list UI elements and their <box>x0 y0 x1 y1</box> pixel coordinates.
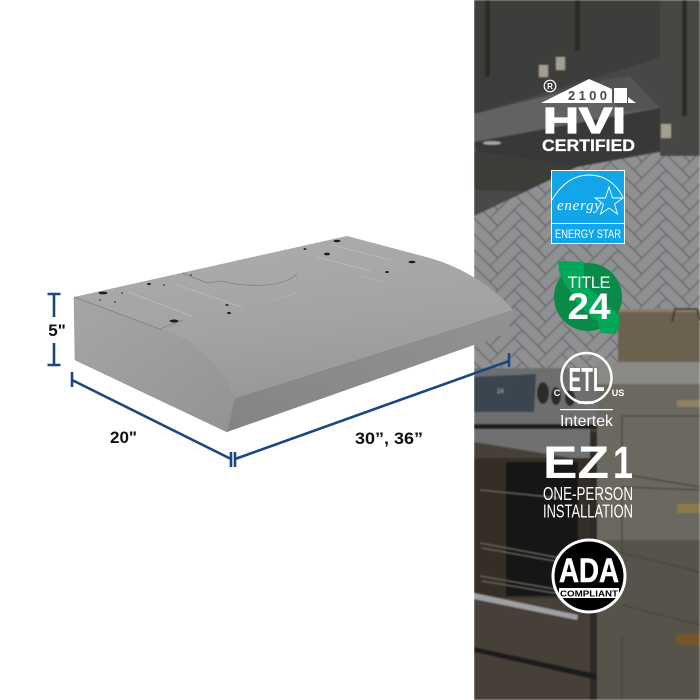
badge: ADA compliant: COMPLIANT <box>560 588 619 598</box>
badge: Title 24: 24 <box>568 286 611 327</box>
badge: HVI certified <box>541 79 636 155</box>
screw holes <box>98 240 416 322</box>
badge: EZ1 one-person installation: EZ <box>543 437 609 488</box>
lower cabinets <box>596 384 700 540</box>
mounting plate details <box>74 245 390 329</box>
badge: HVI certified: HVI <box>543 100 626 141</box>
wall under hood <box>474 153 577 216</box>
badge: ETL listed Intertek <box>554 353 624 430</box>
badge: Energy Star: energy <box>557 198 601 214</box>
badge: Energy Star <box>552 170 624 244</box>
range control panel <box>474 368 597 428</box>
range hood product <box>74 236 513 432</box>
dimension: height 5 inches <box>48 294 66 365</box>
countertop <box>597 362 700 386</box>
badge: EZ1 one-person installation: ONE-PERSON <box>543 484 633 504</box>
badge: ETL listed Intertek: US <box>612 388 624 398</box>
badge: ETL listed Intertek: Intertek <box>560 413 614 430</box>
badge: HVI certified: 2100 <box>568 88 607 103</box>
oven racks <box>480 490 560 594</box>
dimension: width 30 and 36 inches: 30”, 36” <box>355 429 423 448</box>
badge: EZ1 one-person installation <box>543 437 633 522</box>
kitchen photo panel: 24 <box>497 389 504 395</box>
hood top surface <box>74 236 513 398</box>
kitchen photo panel <box>474 0 700 700</box>
pot <box>618 309 700 366</box>
badge: HVI certified: CERTIFIED <box>542 137 635 155</box>
badge: Title 24 <box>554 261 622 334</box>
badge: Energy Star: ENERGY STAR <box>555 227 621 241</box>
badge: ADA compliant <box>552 538 626 614</box>
cabinet knobs <box>539 57 671 138</box>
badge: ETL listed Intertek: ETL <box>568 361 604 398</box>
dimension: width 30 and 36 inches <box>235 353 509 467</box>
backsplash tile <box>474 152 700 390</box>
cabinet handles <box>677 400 700 645</box>
hood front lip <box>227 310 513 432</box>
dimension: height 5 inches: 5" <box>48 321 66 340</box>
badge: EZ1 one-person installation: INSTALLATION <box>543 502 633 522</box>
badge: HVI certified: R <box>547 82 553 91</box>
badge: ADA compliant: ADA <box>559 552 619 590</box>
oven door <box>474 429 597 700</box>
badge: ETL listed Intertek: C <box>554 388 561 398</box>
hood side panel <box>74 297 235 432</box>
dimension: depth 20 inches <box>72 372 231 467</box>
dimension: depth 20 inches: 20" <box>110 428 137 447</box>
badge: Title 24: TITLE <box>568 274 610 292</box>
right cabinet column <box>660 0 700 156</box>
badge: EZ1 one-person installation: 1 <box>613 437 633 488</box>
hood above range <box>474 59 659 152</box>
badge: ETL listed Intertek: LISTED <box>578 400 595 405</box>
upper cabinets <box>485 0 580 77</box>
